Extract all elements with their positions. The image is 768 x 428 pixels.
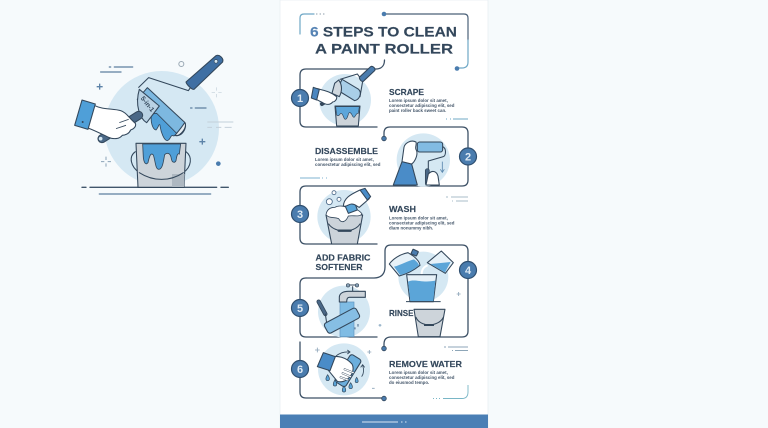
step 6 illustration: remove water [315,343,375,395]
title: 6 STEPS TO CLEAN [310,24,457,40]
step 1 text: Lorem ipsum dolor sit amet, [389,98,448,103]
step 3 accent [446,197,468,201]
step 2 text: consectetur adipiscing elit, sed [315,162,381,167]
step 3 label: WASH [389,204,416,214]
hero illustration: hand scraping roller over paint can: 5-in-1 [139,95,155,114]
step 5 label: RINSE [389,308,414,318]
step 3 illustration: wash [317,188,371,244]
title: A PAINT ROLLER [315,40,453,56]
step 2 label: DISASSEMBLE [315,146,378,156]
panel: infographic sheet [280,0,488,428]
step 1 text: consectetur adipiscing elit, sed [389,103,455,108]
step 6 text: do eiusmod tempo. [389,380,429,385]
step 1 accent [446,118,468,120]
footer band [280,414,488,428]
step 2 text: Lorem ipsum dolor sit amet, [315,157,374,162]
step frames connector lines [300,60,468,401]
number badge 2 [460,148,476,165]
step 3 text [389,216,455,230]
step 2 text [315,157,381,167]
step 2 illustration: disassemble [393,133,450,187]
step 4 label: SOFTENER [316,262,362,272]
hero illustration: hand scraping roller over paint can [75,55,233,194]
step 2 accent [300,177,327,179]
step 3 text: consectetur adipiscing elit, sed [389,220,455,226]
step 6 accents [433,347,468,398]
step 6 text [389,370,455,385]
number badge 1: 1 [297,93,303,105]
number badge 1 [292,90,308,106]
number badge 3 [292,206,308,222]
number badge 4: 4 [465,265,472,277]
number badge 5: 5 [297,303,303,315]
number badge 5 [292,300,308,316]
step 1 illustration: scrape [311,66,375,126]
step 1 text [389,98,455,113]
number badge 6: 6 [297,364,303,376]
step 1 label: SCRAPE [389,87,424,97]
rinse bucket icon [379,309,445,337]
title [310,24,457,56]
step 1 text: paint roller back sweet can. [389,108,446,113]
step 6 text: consectetur adipiscing elit, sed [389,375,455,380]
step 6 label: REMOVE WATER [389,359,462,369]
number badge 4 [460,262,476,278]
step 5 illustration: rinse under tap [318,284,370,338]
step 3 text: Lorem ipsum dolor sit amet, [389,216,448,220]
number badge 6 [292,360,308,378]
step 6 text: Lorem ipsum dolor sit amet, [389,370,448,375]
title bracket frame [300,12,468,71]
step 3 text: diam nonummy nibh. [389,226,433,230]
step 4 illustration: add fabric softener [389,249,461,302]
step 4 label [316,252,370,272]
number badge 3: 3 [297,209,303,221]
number badge 2: 2 [465,152,471,164]
step 4 label: ADD FABRIC [316,252,370,262]
